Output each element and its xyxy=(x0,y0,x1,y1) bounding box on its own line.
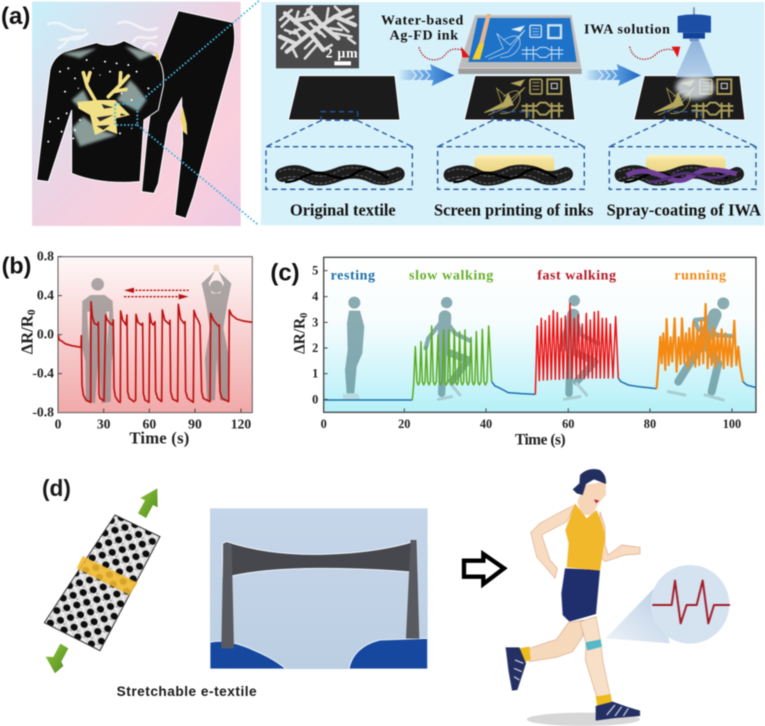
y axis labels: 3 xyxy=(312,315,318,329)
y axis labels: 5 xyxy=(312,264,318,278)
y axis title: 0 xyxy=(299,313,310,318)
arrow: ink pointer xyxy=(419,47,470,60)
icon: splash pattern xyxy=(47,47,159,147)
sensor band xyxy=(585,639,602,651)
screen printing frame xyxy=(458,14,582,74)
x axis title: Time (s) xyxy=(515,432,566,449)
figure: running xyxy=(668,297,732,400)
runner cap xyxy=(573,469,606,495)
runner back arm xyxy=(531,505,575,578)
line: transition after fast walking xyxy=(618,378,657,389)
runner neck and face xyxy=(577,482,606,515)
arrows: motion direction xyxy=(124,288,189,299)
heading: panel a label: (a) xyxy=(1,3,30,30)
figure: standing person xyxy=(82,278,114,403)
caption: Stretchable e-textile xyxy=(117,684,257,699)
fabric: original xyxy=(288,76,400,120)
heading: panel d label: (d) xyxy=(42,475,71,501)
label: ink xyxy=(381,13,464,43)
sensor callout xyxy=(606,565,730,644)
fabric: printed xyxy=(464,76,575,120)
y axis title: ΔR/R xyxy=(291,318,308,354)
SEM image xyxy=(276,5,359,68)
heading: panel c label: (c) xyxy=(270,260,300,287)
plot area xyxy=(58,257,252,413)
activity labels xyxy=(331,269,726,284)
runner front arm xyxy=(600,512,640,562)
spray cone and cloud xyxy=(676,41,714,99)
step labels xyxy=(290,200,761,219)
x axis labels xyxy=(55,417,251,432)
figure: slow walking xyxy=(426,297,470,399)
step labels: Screen printing of inks xyxy=(434,200,593,219)
conductive band xyxy=(77,556,138,595)
shadow xyxy=(527,713,640,726)
x axis labels: 0 xyxy=(321,417,327,431)
y axis labels xyxy=(312,264,318,406)
arrow: IWA pointer xyxy=(630,47,680,59)
y axis labels: 0.8 xyxy=(37,249,54,264)
activity labels: running xyxy=(674,269,726,284)
figure: fast walking xyxy=(560,295,598,399)
y axis labels: 0.4 xyxy=(37,288,54,303)
label: IWA solution: IWA solution xyxy=(584,23,670,38)
step labels: Original textile xyxy=(290,200,396,219)
activity labels: slow walking xyxy=(409,269,493,284)
scale label: 2 μm xyxy=(326,46,358,61)
y axis labels: -0.8 xyxy=(32,405,54,420)
callout: dotted zoom lines xyxy=(115,0,260,225)
runner tank top xyxy=(565,503,605,571)
icon: shirt xyxy=(37,41,164,182)
heading: panel b label: (b) xyxy=(2,253,31,279)
icon: leg emblem xyxy=(180,107,187,135)
line: transition after running xyxy=(743,382,756,388)
icon: steam wisps xyxy=(48,22,157,48)
step arrow 1 xyxy=(398,64,454,86)
x axis labels: 40 xyxy=(480,417,492,431)
line: slow walking xyxy=(412,326,492,400)
runner back foot xyxy=(506,647,531,691)
arrow: stretch up xyxy=(138,488,158,518)
x axis labels: 60 xyxy=(562,417,574,431)
y axis labels: 0.0 xyxy=(37,327,54,342)
x axis labels: 80 xyxy=(644,417,656,431)
x axis labels xyxy=(321,417,741,431)
textile cross-section: printed xyxy=(447,155,569,183)
runner front leg xyxy=(580,617,610,697)
line: fast walking xyxy=(535,303,618,394)
x axis labels: 60 xyxy=(142,417,156,432)
textile cross-section: coated xyxy=(618,155,740,183)
dashed zoom outlines xyxy=(266,112,756,189)
fabric: spray-coated xyxy=(634,76,745,120)
y axis labels: 2 xyxy=(312,341,318,355)
runner mouth xyxy=(594,499,599,503)
icon: perforated textile xyxy=(44,515,160,651)
x axis labels: 120 xyxy=(231,417,251,432)
axis ticks xyxy=(58,257,241,413)
x axis labels: 90 xyxy=(188,417,202,432)
line: running xyxy=(657,304,743,389)
x axis labels: 20 xyxy=(398,417,410,431)
icon: deer emblem xyxy=(77,73,130,135)
x axis labels: 100 xyxy=(723,417,741,431)
figure: resting xyxy=(342,297,364,399)
icon: leggings xyxy=(142,11,235,218)
line: transition after slow walking xyxy=(492,382,535,394)
panel c: activity sensing chart xyxy=(270,257,756,449)
scale bar xyxy=(334,61,351,65)
panel a: garment photo xyxy=(32,0,260,226)
step labels: Spray-coating of IWA xyxy=(607,200,761,219)
process background xyxy=(261,2,764,225)
figure: arms raised person xyxy=(202,264,231,402)
arrow: leads to wearable xyxy=(464,554,504,584)
squeegee xyxy=(475,14,491,59)
panel a: process steps xyxy=(261,2,764,225)
y axis title: ΔR/R xyxy=(17,315,36,354)
line: resistance trace xyxy=(58,302,252,402)
x axis labels: 30 xyxy=(97,417,111,432)
plot area xyxy=(324,257,756,412)
line: resting xyxy=(324,398,412,402)
photo: stretched e-textile bridge xyxy=(210,508,428,669)
runner front foot xyxy=(596,694,640,721)
activity labels: resting xyxy=(331,269,375,284)
y axis labels xyxy=(32,249,54,420)
panel d: stretchable e-textile xyxy=(42,475,428,699)
activity labels: fast walking xyxy=(537,269,616,284)
panel b: arm raise sensing chart xyxy=(2,249,252,448)
arrow: stretch down xyxy=(46,644,68,673)
axis ticks xyxy=(324,271,732,412)
step arrow 2 xyxy=(585,64,641,86)
photo background xyxy=(32,2,241,226)
y axis labels: -0.4 xyxy=(32,366,54,381)
textile cross-section: original xyxy=(279,168,401,183)
x axis labels: 0 xyxy=(55,417,62,432)
y axis title: 0 xyxy=(26,309,38,315)
runner back leg xyxy=(529,620,583,662)
panel d: runner with sensor xyxy=(464,469,730,726)
icon: spray nozzle xyxy=(678,7,711,41)
x axis title: Time (s) xyxy=(129,429,189,448)
y axis labels: 0 xyxy=(312,392,318,406)
y axis labels: 1 xyxy=(312,367,318,381)
y axis labels: 4 xyxy=(312,290,318,304)
runner shorts xyxy=(561,568,600,622)
label: ink: Ag-FD ink xyxy=(390,28,458,43)
label: ink: Water-based xyxy=(381,13,464,28)
